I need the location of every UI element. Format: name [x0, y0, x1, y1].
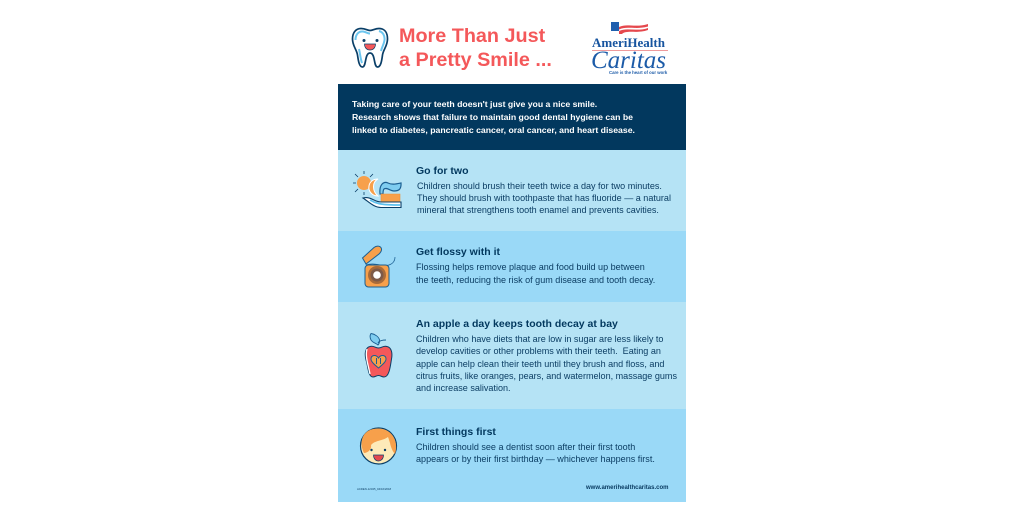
title: More Than Just: [399, 25, 545, 47]
panel: intro banner: [338, 84, 686, 150]
text: apple a day: and increase salivation.: [416, 383, 511, 393]
icon: smiling tooth: [352, 28, 388, 68]
intro text: Taking care of your teeth doesn't just give you a nice smile.: [352, 99, 597, 109]
panel: header: [338, 0, 686, 84]
footer code: ACDEN-12345_04/16/2018: [357, 487, 391, 491]
icon: toothbrush and sun: [353, 171, 402, 208]
text: go for two: Children should brush their teeth twice a day for two minutes.: [417, 181, 662, 191]
text: apple a day: citrus fruits, like oranges, pears, and watermelon, massage gums: [416, 371, 677, 381]
logo: AmeriHealth Caritas: Care is the heart of our work: [609, 70, 667, 75]
text: go for two: Go for two: [416, 165, 468, 177]
text: get flossy: [416, 246, 655, 285]
icon: dental floss: [362, 246, 396, 288]
title: a Pretty Smile ...: [399, 49, 552, 71]
intro text: linked to diabetes, pancreatic cancer, oral cancer, and heart disease.: [352, 125, 635, 135]
logo: AmeriHealth Caritas: AmeriHealth: [592, 35, 665, 50]
text: get flossy: Flossing helps remove plaque and food build up between: [416, 262, 645, 272]
text: get flossy: the teeth, reducing the risk of gum disease and tooth decay.: [416, 275, 655, 285]
text: get flossy: Get flossy with it: [416, 246, 500, 258]
footer url: www.amerihealthcaritas.com: [586, 485, 668, 491]
text: first things first: First things first: [416, 426, 496, 438]
title: [399, 25, 552, 71]
text: apple a day: develop cavities or other problems with their teeth. Eating an: [416, 346, 661, 356]
text: go for two: mineral that strengthens tooth enamel and prevents cavities.: [417, 205, 659, 215]
text: apple a day: apple can help clean their teeth until they brush and floss, and: [416, 359, 664, 369]
logo: AmeriHealth Caritas: Caritas: [591, 47, 666, 74]
text: go for two: They should brush with toothpaste that has fluoride — a natural: [417, 193, 671, 203]
text: apple a day: Children who have diets that are low in sugar are less likely to: [416, 334, 663, 344]
panel: first things first: [338, 409, 686, 502]
text: apple a day: An apple a day keeps tooth decay at bay: [416, 318, 618, 330]
panel: get flossy: [338, 231, 686, 302]
icon: apple: [364, 333, 392, 378]
text: go for two: [416, 165, 671, 215]
text: apple a day: [416, 318, 677, 393]
text: first things first: appears or by their first birthday — whichever happens first.: [416, 454, 655, 464]
intro text: Research shows that failure to maintain good dental hygiene can be: [352, 112, 633, 122]
panel: go for two: [338, 150, 686, 231]
intro text: [352, 99, 635, 135]
icon: child face: [360, 427, 398, 465]
logo: AmeriHealth Caritas: [591, 22, 668, 75]
text: first things first: Children should see a dentist soon after their first tooth: [416, 442, 635, 452]
text: first things first: [416, 426, 655, 464]
panel: apple a day: [338, 302, 686, 409]
